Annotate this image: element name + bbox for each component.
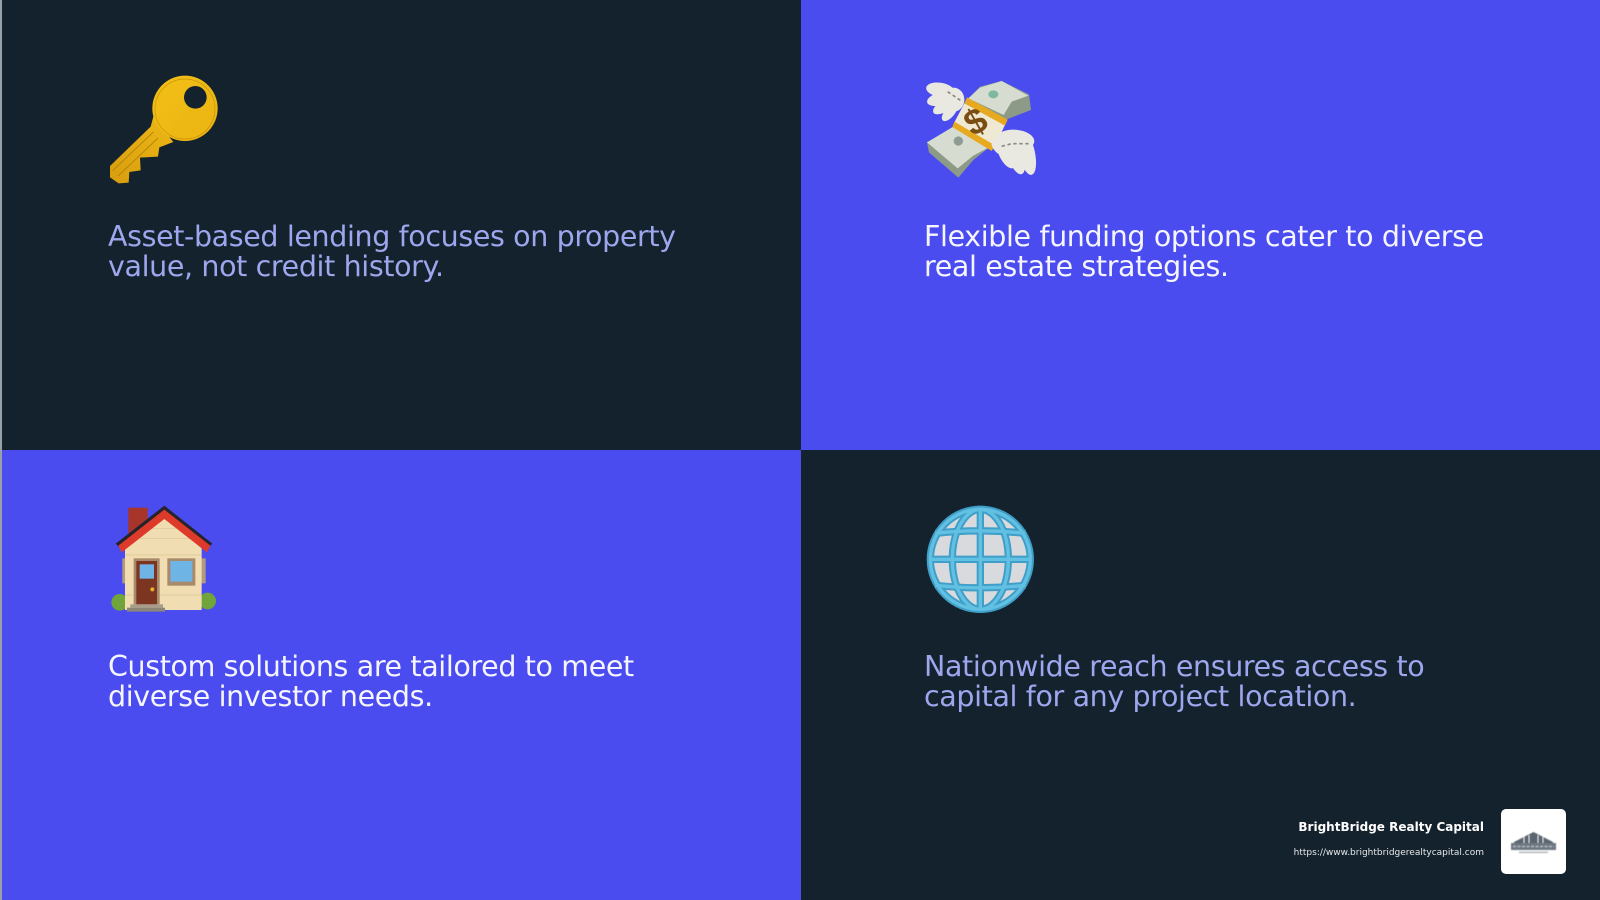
brand name: BrightBridge Realty Capital <box>1298 820 1484 834</box>
text: asset-based lending: value, not credit history. <box>108 250 444 283</box>
panel: flexible funding <box>801 0 1600 450</box>
text: flexible funding: real estate strategies. <box>924 250 1229 283</box>
text: custom solutions: Custom solutions are tailored to meet <box>108 650 634 683</box>
panel: nationwide reach <box>801 450 1600 900</box>
text: nationwide reach <box>924 650 1424 713</box>
left edge strip <box>0 0 2 900</box>
text: flexible funding <box>924 220 1484 283</box>
icon: house <box>111 506 216 612</box>
text: asset-based lending: Asset-based lending focuses on property <box>108 220 676 253</box>
brand url: https://www.brightbridgerealtycapital.com <box>1294 848 1484 858</box>
text: custom solutions: diverse investor needs. <box>108 680 433 713</box>
text: nationwide reach: Nationwide reach ensures access to <box>924 650 1424 683</box>
text: nationwide reach: capital for any project location. <box>924 680 1356 713</box>
brand logo <box>1501 809 1566 874</box>
text: asset-based lending <box>108 220 676 283</box>
text: custom solutions <box>108 650 634 713</box>
panel: asset-based lending <box>0 0 801 450</box>
icon: money with wings: $ <box>956 98 994 144</box>
panel: custom solutions <box>0 450 801 900</box>
icon: globe <box>926 506 1034 613</box>
text: flexible funding: Flexible funding options cater to diverse <box>924 220 1484 253</box>
icon: money with wings <box>926 81 1036 178</box>
logo mark <box>1510 832 1557 854</box>
icon: key <box>110 76 218 184</box>
